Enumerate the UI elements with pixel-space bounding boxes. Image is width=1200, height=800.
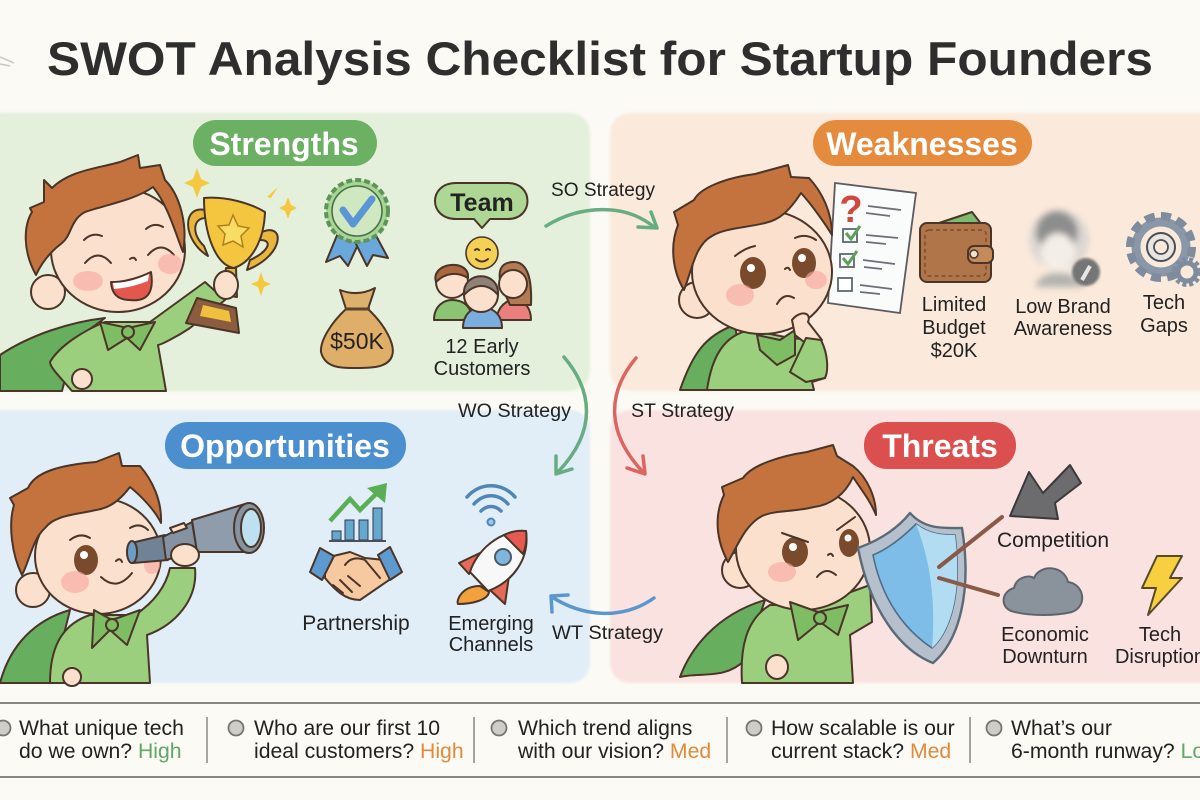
checklist item 1: do we own? High	[19, 740, 182, 763]
character: celebrating boy	[0, 155, 225, 391]
icon: handshake	[310, 547, 402, 600]
checklist item 4: current stack? Med	[771, 740, 951, 763]
checklist strip	[0, 703, 1200, 777]
icon: wallet	[920, 212, 993, 282]
label: emerging channels: Channels	[449, 634, 533, 656]
label: tech disruption	[1115, 624, 1200, 668]
heading: threats: Threats	[882, 428, 998, 464]
label: partnership: Partnership	[302, 612, 410, 635]
title: SWOT Analysis Checklist for Startup Founders	[47, 32, 1153, 85]
arrow: SO strategy: SO Strategy	[551, 180, 655, 201]
label: emerging channels: Emerging	[448, 613, 534, 635]
character: boy with telescope	[0, 453, 195, 686]
heading: strengths: Strengths	[209, 126, 359, 162]
heading: opportunities	[165, 422, 406, 469]
label: 12 early customers: 12 Early	[445, 336, 519, 358]
arrow: SO strategy	[546, 180, 657, 228]
icon: rocket	[458, 531, 527, 604]
label: low brand awareness: Awareness	[1014, 318, 1112, 340]
heading: strengths	[193, 120, 377, 166]
label: tech disruption: Tech	[1139, 624, 1181, 646]
label: economic downturn	[1001, 624, 1089, 668]
icon: lightning bolt	[1142, 556, 1182, 615]
label: 12 early customers	[434, 336, 530, 380]
label: limited budget: Budget	[922, 317, 986, 339]
heading: opportunities: Opportunities	[180, 428, 390, 464]
arrow: WT strategy: WT Strategy	[552, 623, 664, 644]
icon: ribbon badge	[326, 180, 388, 266]
label: limited budget: Limited	[922, 294, 986, 316]
icon: telescope	[127, 503, 264, 566]
callout: team bubble	[435, 183, 528, 228]
checklist item 4: How scalable is our	[771, 717, 955, 740]
character: thinking boy	[673, 165, 832, 390]
icon: storm cloud	[1004, 568, 1082, 615]
checklist item 3	[492, 717, 711, 763]
icon: money bag $50K	[321, 288, 393, 368]
label: limited budget	[922, 294, 986, 362]
checklist item 2	[228, 717, 464, 763]
icon: checklist paper	[828, 183, 916, 313]
label: tech gaps	[1140, 292, 1188, 337]
icon: checklist paper: ?	[839, 189, 863, 231]
label: emerging channels	[448, 613, 534, 656]
checklist item 1: What unique tech	[19, 717, 184, 740]
arrow: WO strategy: WO Strategy	[458, 401, 572, 422]
checklist item 1	[0, 717, 184, 763]
checklist item 3: Which trend aligns	[518, 717, 692, 740]
icon: growth chart	[329, 483, 387, 541]
heading: threats	[864, 422, 1016, 469]
panel: weaknesses	[610, 113, 1200, 391]
character: defending boy	[680, 445, 876, 683]
icon: competition arrow	[1010, 465, 1081, 519]
label: competition: Competition	[997, 529, 1109, 552]
panel: opportunities	[0, 410, 590, 686]
label: tech gaps: Gaps	[1140, 315, 1188, 337]
icon: team people	[434, 237, 531, 328]
checklist item 3: with our vision? Med	[517, 740, 711, 763]
label: low brand awareness	[1014, 296, 1112, 340]
checklist item 5	[986, 717, 1200, 763]
checklist item 2: ideal customers? High	[254, 740, 464, 763]
label: $50K: $50K	[330, 328, 385, 354]
label: 12 early customers: Customers	[434, 358, 530, 380]
checklist item 5: What’s our	[1011, 717, 1112, 740]
icon: gears	[1130, 216, 1200, 285]
panel: threats	[610, 410, 1200, 683]
checklist item 4	[746, 717, 955, 763]
label: economic downturn: Downturn	[1002, 646, 1088, 668]
label: tech gaps: Tech	[1143, 292, 1185, 314]
icon: arrows hitting shield	[939, 517, 1002, 595]
arrow: ST strategy	[615, 358, 735, 474]
label: limited budget: $20K	[931, 340, 978, 362]
callout: team bubble: Team	[450, 189, 514, 217]
checklist item 2: Who are our first 10	[254, 717, 440, 740]
panel: strengths	[0, 113, 590, 391]
icon: gold trophy	[184, 168, 297, 333]
icon: wifi signal	[467, 486, 515, 526]
label: low brand awareness: Low Brand	[1015, 296, 1111, 318]
label: economic downturn: Economic	[1001, 624, 1089, 646]
arrow: ST strategy: ST Strategy	[631, 401, 735, 422]
arrow: WO strategy	[458, 357, 586, 474]
icon: shield	[858, 513, 965, 663]
arrow: WT strategy	[551, 595, 664, 644]
icon: blurred person	[1029, 210, 1100, 287]
heading: weaknesses	[813, 120, 1032, 166]
heading: weaknesses: Weaknesses	[826, 126, 1018, 162]
